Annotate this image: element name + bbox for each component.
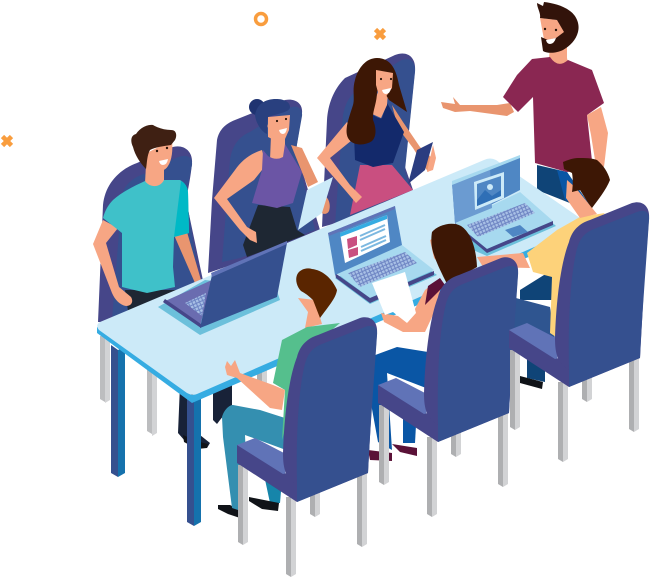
laptop: left (158, 241, 287, 335)
shoes (249, 497, 279, 511)
arm right (174, 232, 201, 283)
grey table legs (100, 336, 267, 436)
legs of seated people behind table (178, 380, 232, 449)
arm left (317, 122, 362, 203)
person: man in green shirt seated front (218, 268, 340, 518)
table (97, 158, 586, 403)
pants (537, 165, 595, 213)
skin (566, 180, 597, 218)
blue table legs (111, 345, 201, 526)
chair: front middle (378, 257, 518, 517)
hair and beard (537, 2, 579, 53)
hair (347, 58, 407, 144)
hair (296, 268, 337, 318)
back chair: right (322, 53, 415, 227)
arm (225, 360, 285, 410)
face (376, 70, 393, 98)
person: woman in purple top (214, 99, 333, 257)
neck (370, 92, 388, 118)
rear leg (263, 470, 282, 503)
shirt (503, 57, 604, 172)
person: standing bearded man (441, 2, 608, 213)
neck (298, 298, 322, 328)
screen (452, 157, 520, 223)
icon: orange cross left (2, 136, 12, 146)
arm (381, 278, 440, 332)
arm gesture (441, 97, 514, 116)
top (252, 144, 302, 208)
laptop: center (328, 206, 437, 304)
smile (159, 159, 168, 165)
pants (125, 290, 200, 325)
shoulders (214, 150, 266, 243)
face (268, 115, 290, 142)
shirt (273, 323, 340, 440)
face (146, 140, 172, 172)
person: woman seated front centre (368, 224, 477, 461)
hair (131, 125, 176, 169)
photo (474, 172, 504, 210)
pants (403, 418, 416, 443)
pink blocks (347, 236, 358, 258)
pants (520, 270, 556, 300)
paper (372, 272, 416, 323)
skirt (350, 165, 413, 215)
skirt (243, 205, 305, 257)
icon: orange ring (256, 14, 266, 24)
face (540, 18, 567, 45)
chair: front right (509, 202, 649, 462)
tablet (408, 142, 433, 184)
hair (431, 224, 477, 284)
laptop: right (452, 155, 556, 256)
person: man in yellow shirt seated front right (477, 158, 610, 389)
smile (546, 38, 556, 44)
shirt (527, 213, 605, 337)
arm right (392, 105, 433, 172)
arm far (291, 145, 330, 214)
arm left (93, 220, 132, 306)
icon: orange cross top (376, 30, 384, 38)
chair: front left (237, 317, 377, 577)
paper (298, 177, 333, 230)
screen (328, 206, 402, 275)
person: woman in navy top (317, 58, 436, 215)
smile (279, 128, 287, 134)
top (354, 103, 404, 167)
neck (145, 165, 164, 188)
back chair: middle (208, 100, 320, 273)
back chair: left (98, 146, 205, 322)
arm right (587, 107, 608, 167)
neck (270, 135, 290, 160)
bun and hair (249, 99, 265, 115)
neck (549, 45, 568, 67)
person: man in teal shirt (93, 125, 201, 325)
hair (563, 158, 610, 208)
arm (477, 253, 530, 268)
shoes (392, 444, 417, 456)
shirt (103, 180, 189, 293)
head (430, 235, 445, 270)
pants (222, 405, 286, 510)
keyboard (348, 252, 417, 287)
keyboard (467, 203, 535, 237)
